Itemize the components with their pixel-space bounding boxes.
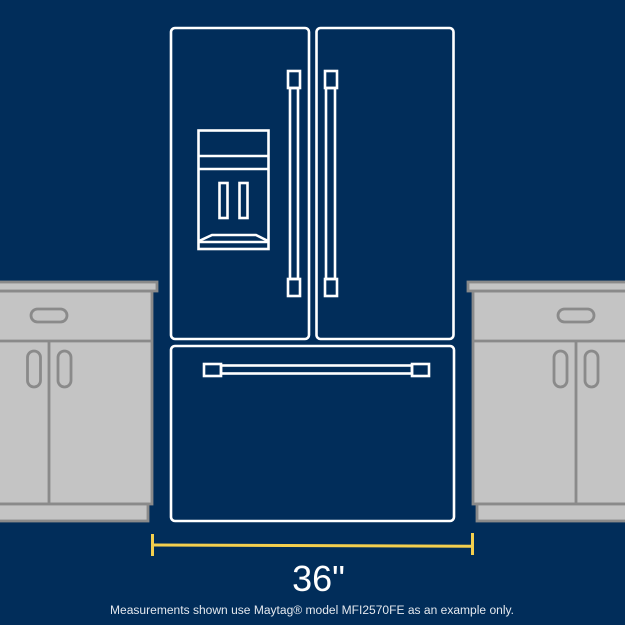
footnote: Measurements shown use Maytag® model MFI2570FE as an example only. — [110, 605, 514, 617]
freezer handle — [204, 364, 429, 376]
right door handle — [325, 71, 337, 296]
width dimension line — [151, 533, 474, 556]
left door handle — [288, 71, 300, 296]
left cabinet — [0, 282, 157, 521]
right cabinet — [468, 282, 625, 521]
right door — [316, 28, 454, 339]
refrigerator outline — [171, 28, 454, 521]
width label: 36" — [292, 558, 345, 599]
freezer drawer — [171, 346, 454, 521]
water and ice dispenser — [198, 130, 268, 249]
left door — [171, 28, 309, 339]
